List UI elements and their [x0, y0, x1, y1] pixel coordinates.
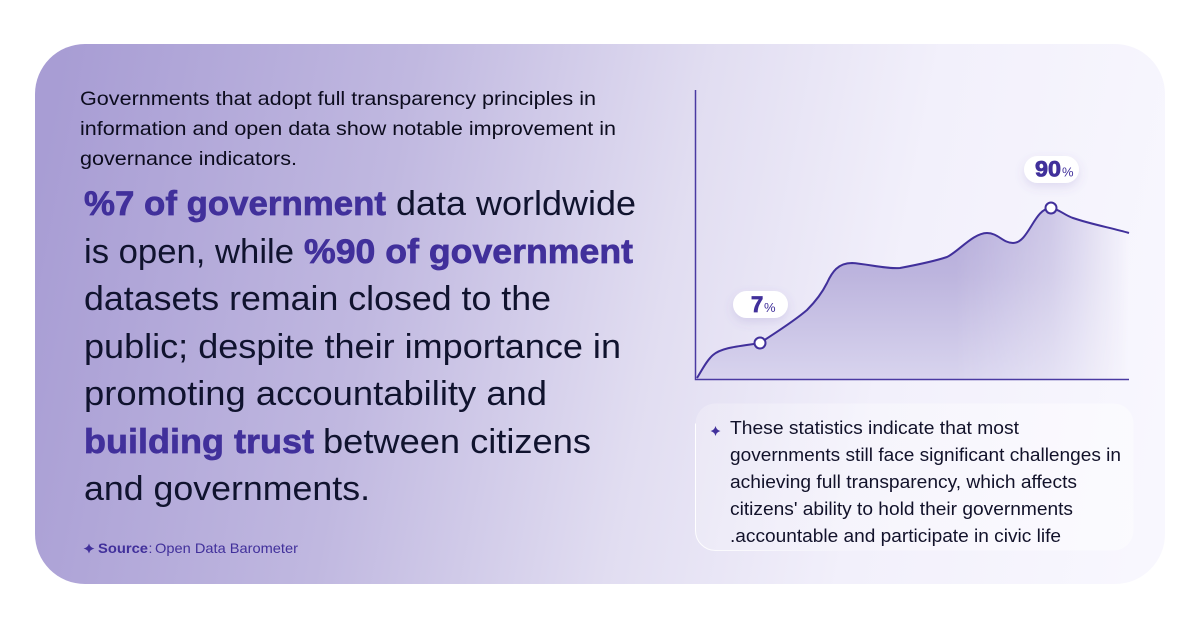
source line: Source: [98, 540, 148, 556]
intro text block: [80, 88, 616, 170]
callout text: .accountable and participate in civic life: [730, 525, 1061, 546]
label: 90%: %: [1062, 164, 1074, 180]
main statement text block: [84, 185, 636, 508]
main statement text block: %7 of government: [84, 185, 387, 223]
label: 90%: [1024, 156, 1079, 183]
main statement text block: datasets remain closed to the: [84, 280, 551, 318]
label: 90%: 90: [1035, 156, 1061, 182]
chart trend line: [697, 208, 1129, 378]
callout box: [696, 404, 1134, 550]
main statement text block: data worldwide: [396, 185, 636, 223]
intro text block: governance indicators.: [80, 148, 297, 170]
label: 7%: [733, 291, 788, 318]
line chart: [696, 90, 1129, 380]
callout text: citizens' ability to hold their governments: [730, 498, 1073, 519]
chart axes: [696, 90, 1129, 380]
main statement text block: between citizens: [323, 423, 591, 461]
main statement text block: %90 of government: [304, 233, 634, 271]
main statement text block: promoting accountability and: [84, 375, 547, 413]
main statement text block: public; despite their importance in: [84, 328, 621, 366]
callout text: achieving full transparency, which affects: [730, 471, 1077, 492]
callout text: governments still face significant challenges in: [730, 444, 1121, 465]
source line: Open Data Barometer: [155, 540, 298, 556]
main statement text block: is open, while: [84, 233, 294, 271]
main statement text block: and governments.: [84, 470, 370, 508]
callout text: [730, 417, 1121, 546]
callout text: These statistics indicate that most: [730, 417, 1019, 438]
label: 7%: %: [764, 300, 776, 315]
source line: :: [148, 540, 152, 556]
chart area fill: [697, 208, 1129, 379]
data point: 7%: [754, 338, 766, 348]
data point: 90%: [1046, 202, 1056, 214]
main statement text block: building trust: [84, 423, 315, 461]
intro text block: information and open data show notable improvement in: [80, 118, 616, 140]
intro text block: Governments that adopt full transparency principles in: [80, 88, 596, 110]
icon: sparkle: [710, 426, 720, 436]
label: 7%: 7: [751, 292, 763, 317]
source line: [84, 540, 298, 556]
